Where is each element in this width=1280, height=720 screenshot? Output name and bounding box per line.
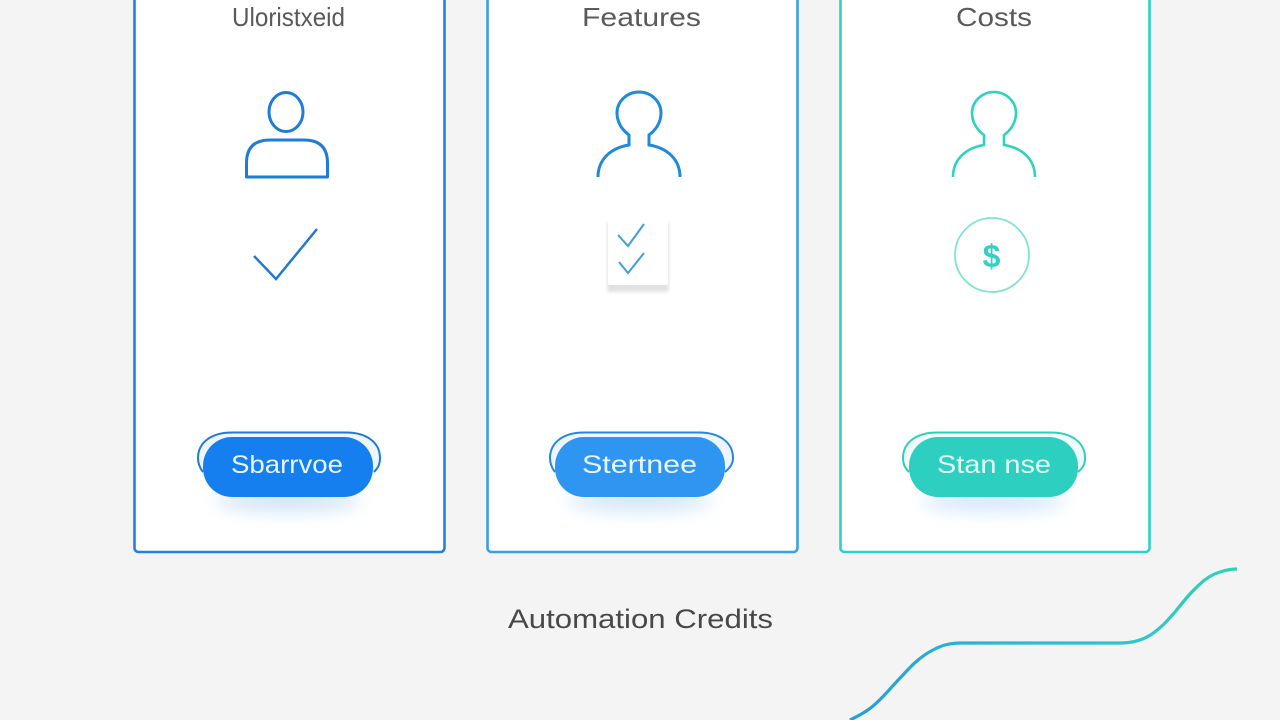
heading: Uloristxeid xyxy=(232,2,345,32)
curve line xyxy=(850,569,1237,720)
panel: Costs xyxy=(840,0,1150,552)
button: Stertnee xyxy=(582,451,697,479)
icon: dollar coin xyxy=(955,218,1029,292)
icon: person xyxy=(953,92,1035,177)
panel: Uloristxeid xyxy=(134,0,444,552)
card frame xyxy=(840,0,1150,552)
card frame xyxy=(134,0,444,552)
panel: Features xyxy=(488,0,798,552)
icon: dollar coin: $ xyxy=(983,238,1001,274)
card frame xyxy=(488,0,798,552)
icon: person xyxy=(246,92,328,177)
button: Sbarrvoe xyxy=(231,451,343,479)
icon: check mark xyxy=(254,229,317,279)
button: Stan nse xyxy=(937,451,1051,479)
icon: checklist xyxy=(607,215,669,292)
icon: person xyxy=(598,92,680,177)
caption: Automation Credits xyxy=(508,604,773,634)
heading: Costs xyxy=(956,2,1032,32)
heading: Features xyxy=(582,2,701,32)
button xyxy=(198,432,380,511)
button xyxy=(903,432,1085,511)
button xyxy=(550,432,733,511)
